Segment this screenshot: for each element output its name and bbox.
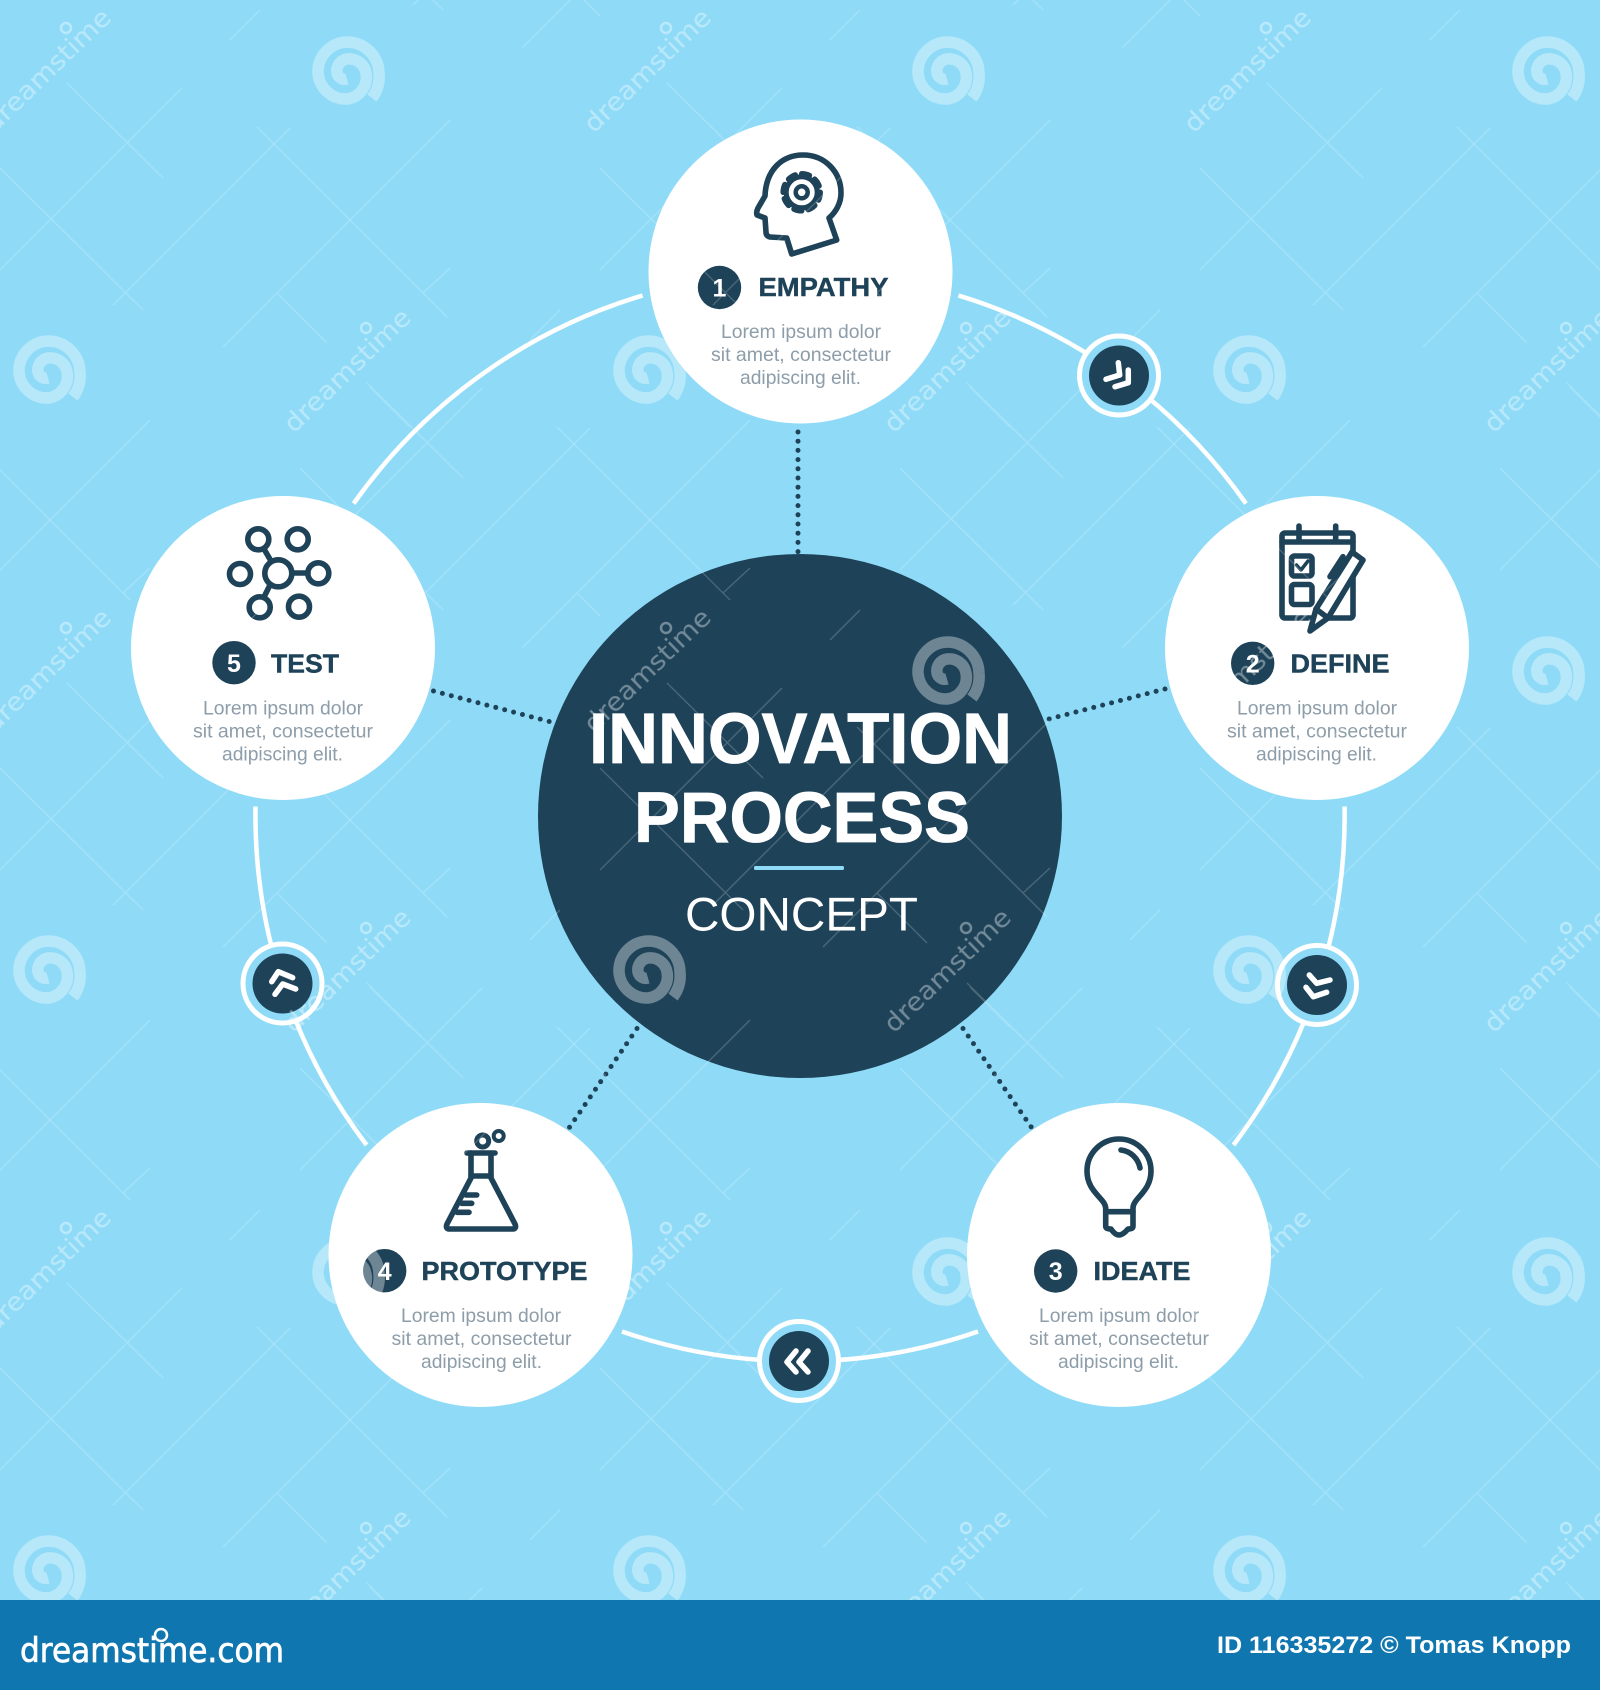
panel: step 3 ideate (967, 1103, 1271, 1407)
step description (1029, 1305, 1209, 1373)
footer image id and credit: ID 116335272 © Tomas Knopp (1217, 1632, 1571, 1659)
step number 1: 1 (713, 274, 727, 302)
step label: EMPATHY (758, 272, 888, 302)
step description: Lorem ipsum dolor (401, 1305, 562, 1327)
step number 4: 4 (378, 1258, 392, 1286)
watermark overlay: dreamstime (1178, 603, 1318, 739)
watermark overlay: dreamstime (278, 903, 418, 1039)
step description: adipiscing elit. (740, 367, 861, 389)
step description: sit amet, consectetur (193, 720, 373, 742)
footer bar (0, 1600, 1600, 1690)
step description (1227, 698, 1407, 766)
footer logo text: dreamstime.com (20, 1631, 284, 1671)
step description: Lorem ipsum dolor (1237, 698, 1398, 720)
step number 2: 2 (1246, 650, 1260, 678)
icon: head with gear (757, 155, 841, 254)
step number 1 (698, 266, 741, 309)
arrow node: ideate to prototype (760, 1322, 838, 1400)
title: innovation process: PROCESS (634, 779, 970, 858)
step description: sit amet, consectetur (711, 344, 891, 366)
arrow node: empathy to define (1080, 336, 1158, 415)
step description: adipiscing elit. (1256, 744, 1377, 766)
step description (392, 1305, 572, 1373)
step number 4 (363, 1249, 406, 1292)
step description: sit amet, consectetur (1029, 1328, 1209, 1350)
step description: adipiscing elit. (1058, 1351, 1179, 1373)
watermark overlay: dreamstime (878, 303, 1018, 439)
step number 5: 5 (227, 650, 241, 678)
step number 2 (1231, 642, 1274, 685)
step label: DEFINE (1290, 648, 1390, 678)
step label: IDEATE (1094, 1256, 1190, 1286)
watermark overlay: dreamstime (878, 903, 1018, 1039)
footer logo mark (155, 1629, 167, 1641)
step description: adipiscing elit. (222, 744, 343, 766)
connecting ring segments (255, 296, 1345, 1361)
watermark overlay: dreamstime (1178, 1203, 1318, 1339)
step description: adipiscing elit. (421, 1351, 542, 1373)
watermark overlay: dreamstime (278, 1503, 418, 1639)
subtitle: concept: CONCEPT (685, 888, 918, 940)
icon: connected nodes (230, 529, 329, 618)
step label: TEST (271, 648, 339, 678)
step description: Lorem ipsum dolor (1039, 1305, 1200, 1327)
panel: step 2 define (1165, 496, 1469, 800)
panel: step 1 empathy (648, 120, 952, 424)
icon: checklist and pen (1282, 526, 1363, 631)
step label: PROTOTYPE (422, 1256, 588, 1286)
arrow node: define to ideate (1278, 946, 1356, 1024)
watermark overlay: dreamstime (278, 303, 418, 439)
step number 3: 3 (1049, 1258, 1063, 1286)
step description: Lorem ipsum dolor (203, 698, 364, 720)
step number 5 (212, 641, 256, 684)
dotted connectors from centre to steps (434, 432, 1165, 1131)
panel: step 5 test (131, 496, 435, 800)
arrow node: prototype to test (243, 944, 322, 1023)
watermark overlay: dreamstime (878, 1503, 1018, 1639)
step description (193, 698, 373, 766)
step description: sit amet, consectetur (1227, 720, 1407, 742)
step number 3 (1034, 1249, 1077, 1293)
title: innovation process: INNOVATION (589, 700, 1012, 779)
panel: step 4 prototype (328, 1103, 632, 1407)
central circle: title (538, 554, 1062, 1078)
icon: flask with bubbles (446, 1131, 516, 1229)
icon: light bulb (1087, 1139, 1151, 1235)
watermark overlay: dreamstime (578, 1203, 718, 1339)
step description: Lorem ipsum dolor (721, 321, 882, 343)
title: innovation process (589, 700, 1012, 858)
watermark overlay: dreamstime (578, 3, 718, 139)
step description: sit amet, consectetur (392, 1328, 572, 1350)
step description (711, 321, 891, 389)
watermark overlay: dreamstime (578, 603, 718, 739)
watermark overlay: dreamstime (1178, 3, 1318, 139)
